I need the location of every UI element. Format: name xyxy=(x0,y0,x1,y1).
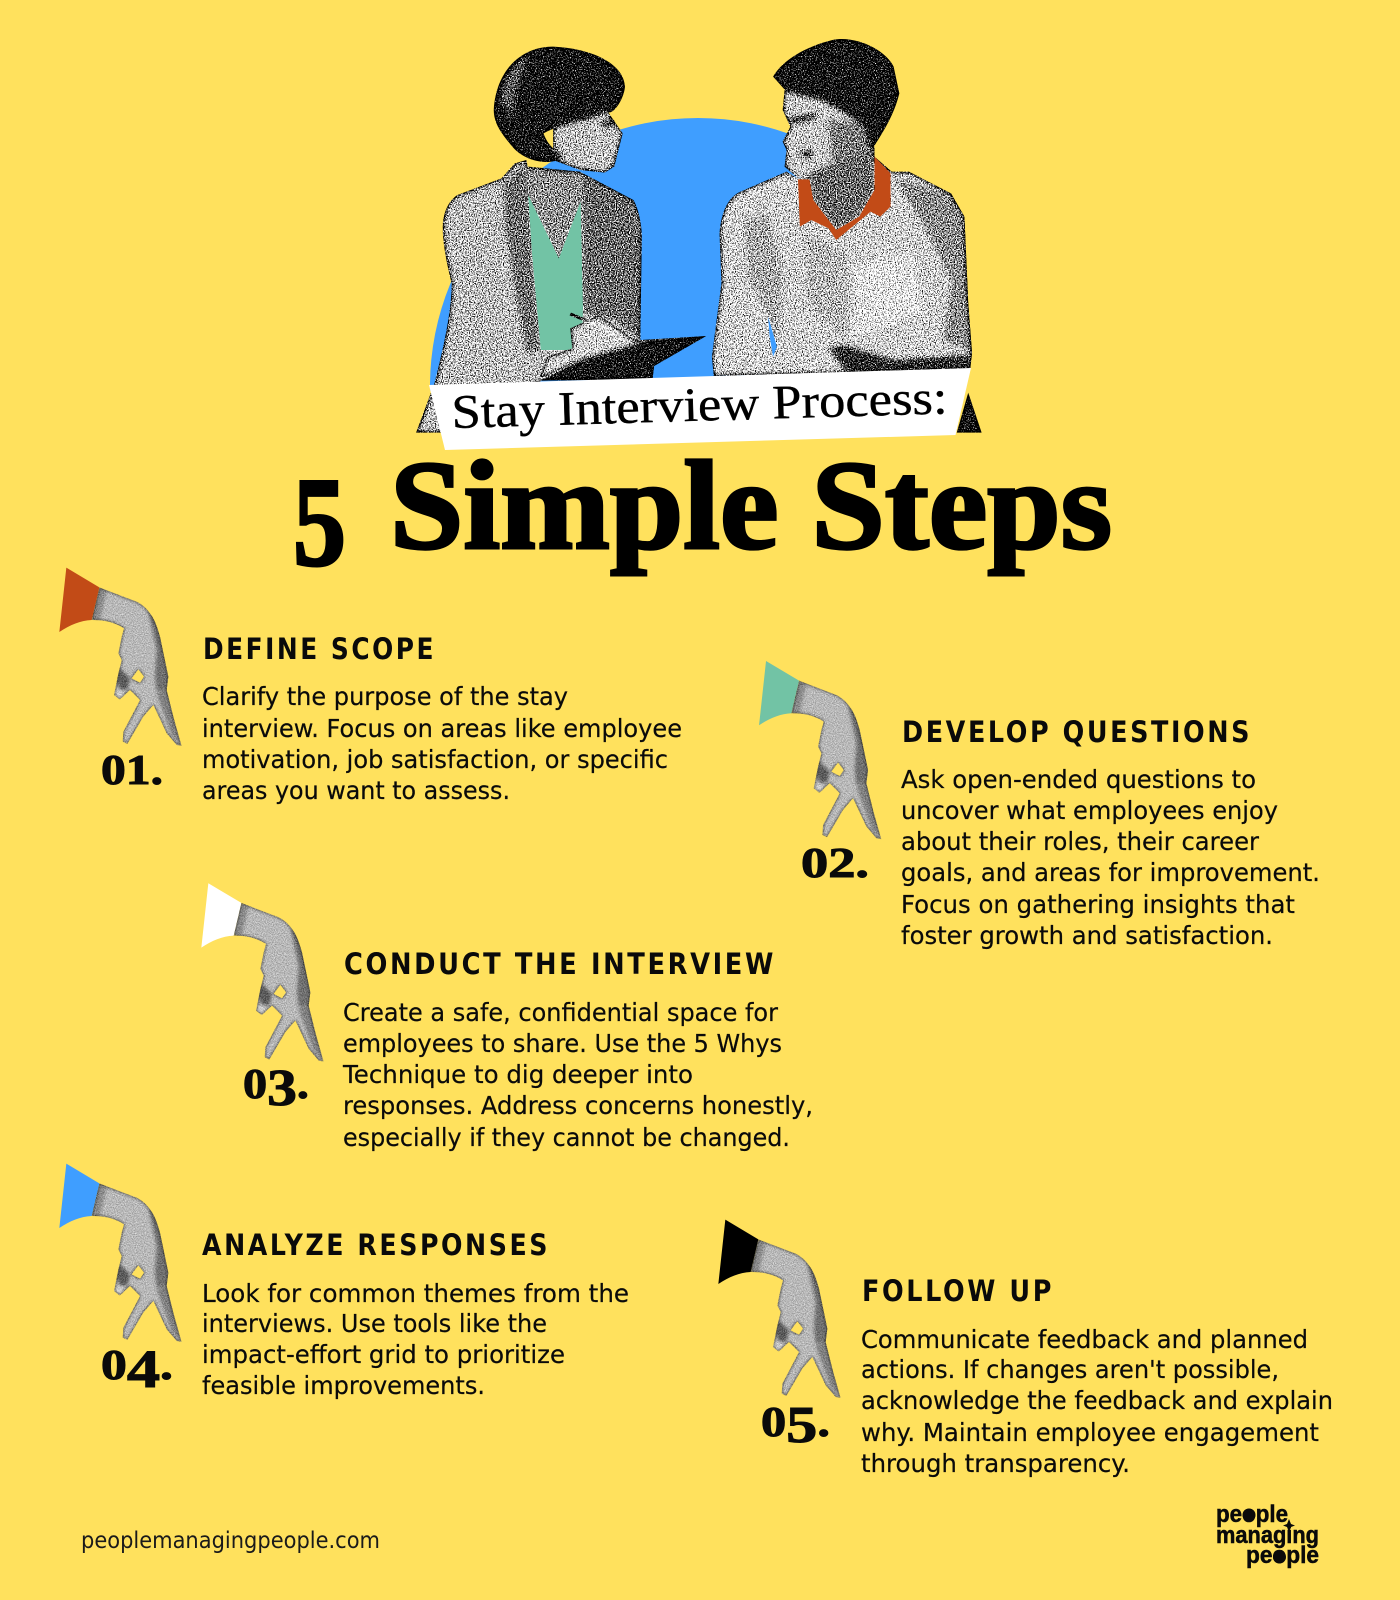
body text: Clarify the purpose of the stay xyxy=(202,682,568,711)
body text: Technique to dig deeper into xyxy=(342,1060,693,1089)
body text: areas you want to assess. xyxy=(202,776,510,805)
man figure xyxy=(712,39,982,433)
main title: Simple Steps xyxy=(390,436,1112,576)
step number: 5 xyxy=(786,1397,817,1454)
step number: 01. xyxy=(101,748,163,794)
hand icon with orange cuff xyxy=(59,568,182,746)
body text: especially if they cannot be changed. xyxy=(343,1123,790,1152)
step 4 panel xyxy=(59,1164,629,1400)
step number: . xyxy=(160,1343,173,1389)
body text: interview. Focus on areas like employee xyxy=(202,714,682,743)
hand icon with green cuff xyxy=(759,661,881,839)
footer website: peoplemanagingpeople.com xyxy=(81,1528,380,1554)
step number: 02. xyxy=(801,841,869,887)
main title: 5 xyxy=(293,453,346,593)
body text: Create a safe, confidential space for xyxy=(343,998,779,1027)
step number: 3 xyxy=(267,1060,297,1117)
banner shape xyxy=(429,368,971,450)
header illustration: two people talking xyxy=(416,39,982,433)
step number: . xyxy=(817,1400,830,1446)
heading: CONDUCT THE INTERVIEW xyxy=(344,947,776,981)
body text: through transparency. xyxy=(861,1449,1130,1478)
heading: ANALYZE RESPONSES xyxy=(202,1228,550,1262)
subtitle banner xyxy=(429,368,971,450)
step number: 0 xyxy=(101,1343,122,1389)
woman hand and clipboard xyxy=(540,314,706,381)
blue circle backdrop xyxy=(430,118,802,390)
logo: people managing people: people xyxy=(1246,1542,1319,1569)
logo: people managing people: people xyxy=(1216,1501,1288,1528)
step number: . xyxy=(297,1062,309,1108)
body text: motivation, job satisfaction, or specific xyxy=(202,745,668,774)
body text xyxy=(342,998,813,1152)
body text: employees to share. Use the 5 Whys xyxy=(343,1029,782,1058)
body text: impact-effort grid to prioritize xyxy=(202,1340,565,1369)
body text: Ask open-ended questions to xyxy=(901,765,1256,794)
blue gap between man's arm and torso xyxy=(768,317,777,357)
body text: interviews. Use tools like the xyxy=(202,1309,547,1338)
body text: feasible improvements. xyxy=(202,1371,485,1400)
orange collar xyxy=(798,157,891,240)
step 5 panel xyxy=(718,1220,1333,1478)
body text: uncover what employees enjoy xyxy=(901,796,1278,825)
step number: 4 xyxy=(127,1339,160,1399)
logo: people managing people xyxy=(1216,1501,1319,1569)
heading: DEVELOP QUESTIONS xyxy=(902,715,1252,749)
body text: acknowledge the feedback and explain xyxy=(861,1386,1333,1415)
body text xyxy=(202,682,682,805)
hand icon with white cuff xyxy=(201,883,324,1062)
step 1 panel xyxy=(59,568,682,805)
woman figure xyxy=(416,47,706,433)
body text: about their roles, their career xyxy=(901,827,1260,856)
body text: Look for common themes from the xyxy=(202,1279,629,1308)
body text xyxy=(901,765,1320,950)
subtitle text: Stay Interview Process: xyxy=(451,371,948,439)
heading: FOLLOW UP xyxy=(862,1274,1054,1308)
body text: foster growth and satisfaction. xyxy=(901,921,1273,950)
green blouse xyxy=(528,195,583,350)
body text xyxy=(861,1325,1333,1478)
step number: 0 xyxy=(243,1062,264,1108)
body text: why. Maintain employee engagement xyxy=(861,1418,1319,1447)
heading: DEFINE SCOPE xyxy=(203,632,436,666)
body text: responses. Address concerns honestly, xyxy=(343,1091,813,1120)
hand icon with blue cuff xyxy=(59,1164,182,1342)
body text: goals, and areas for improvement. xyxy=(901,858,1320,887)
body text: Focus on gathering insights that xyxy=(901,890,1295,919)
body text xyxy=(202,1279,629,1400)
body text: actions. If changes aren't possible, xyxy=(861,1355,1279,1384)
step number: 0 xyxy=(761,1400,782,1446)
logo: people managing people: managing xyxy=(1216,1522,1319,1549)
body text: Communicate feedback and planned xyxy=(861,1325,1308,1354)
step 3 panel xyxy=(201,883,813,1152)
hand icon with black cuff xyxy=(718,1220,841,1398)
step 2 panel xyxy=(759,661,1320,950)
